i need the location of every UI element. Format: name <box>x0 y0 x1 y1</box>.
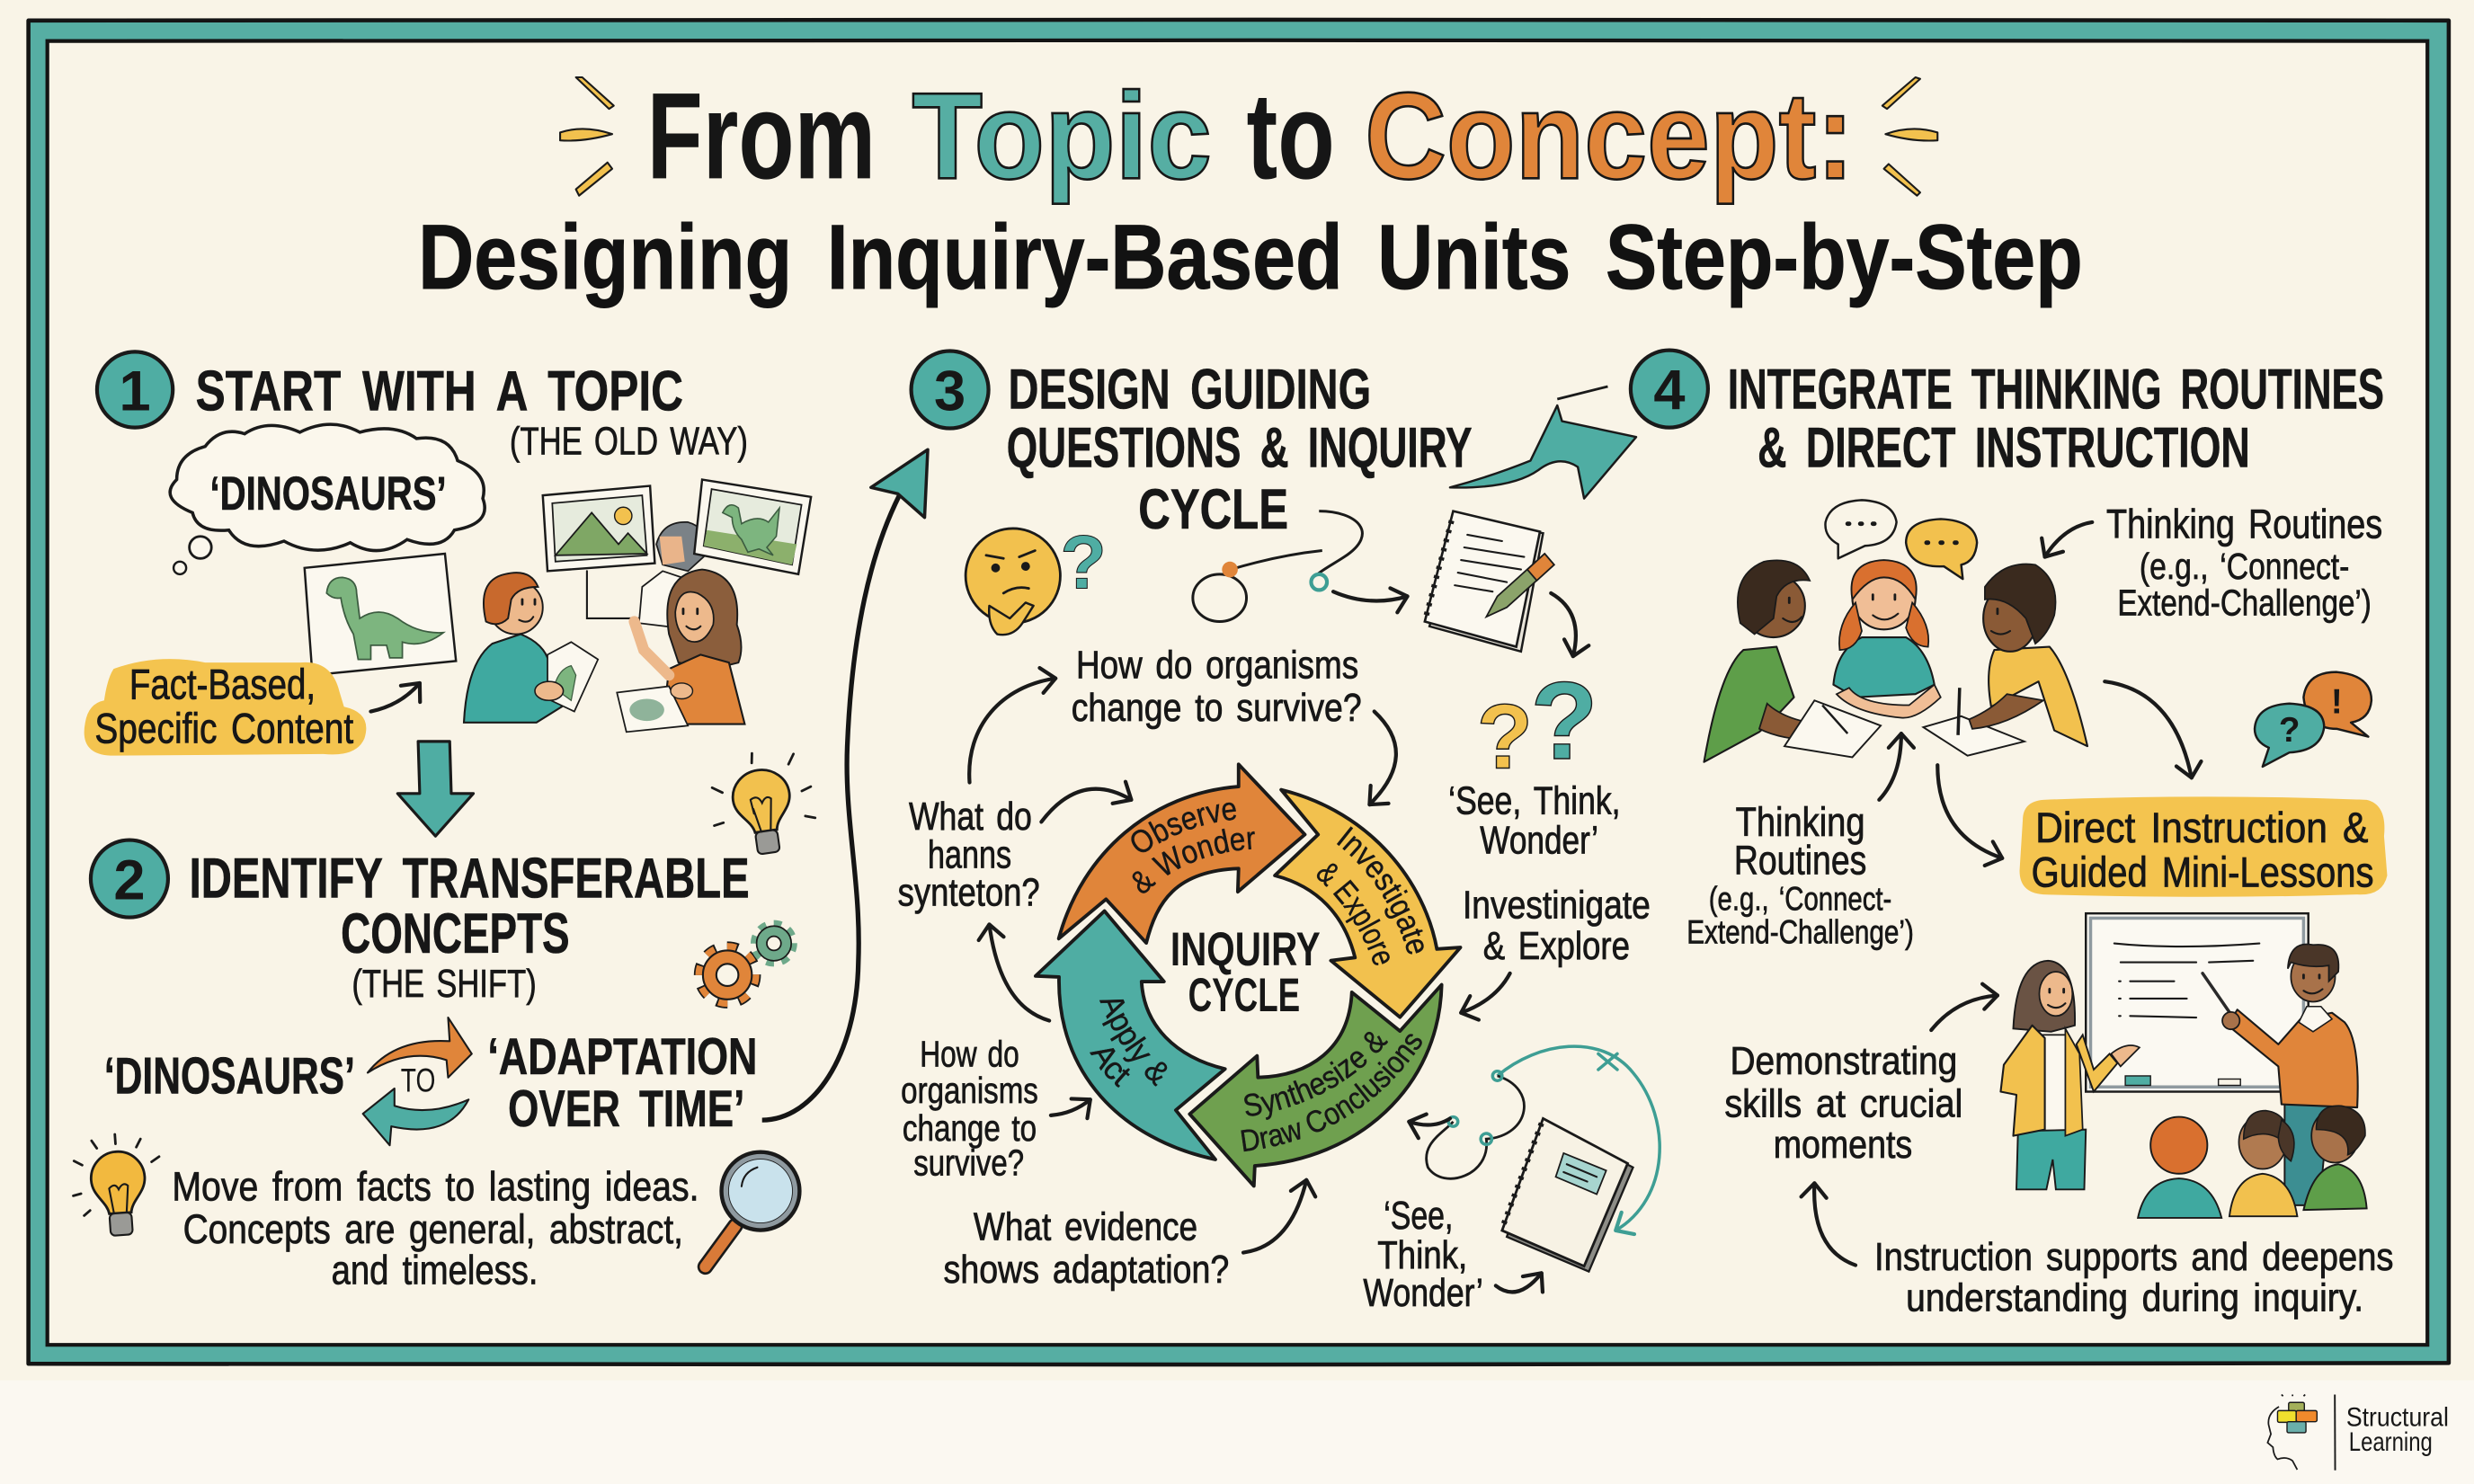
label: thinking routines top: Thinking Routines <box>2106 501 2382 547</box>
icon: magnifying glass <box>706 1155 796 1266</box>
title <box>418 67 2083 308</box>
title line 1: Topic <box>912 67 1212 205</box>
cycle stage: apply and act <box>1034 910 1227 1161</box>
illustration: dinosaur picture <box>694 480 811 574</box>
icon: yellow and teal question marks: ? <box>1477 686 1533 788</box>
illustration: male teacher <box>2203 945 2358 1205</box>
label: see think wonder top: Wonder’ <box>1480 818 1598 862</box>
chart: inquiry cycle <box>1034 762 1462 1188</box>
arrow: notebook to questions <box>1551 593 1576 656</box>
step 2 heading <box>190 848 750 965</box>
arrow: students to direct instruction left <box>1937 765 2002 858</box>
fact-based highlight label <box>85 659 366 756</box>
fact-based highlight label: Specific Content <box>94 706 353 753</box>
spiral notebook <box>1502 1118 1633 1272</box>
arrow: loop to cycle <box>1409 1118 1450 1125</box>
cycle centre label <box>1170 923 1321 1022</box>
label: demonstrating skills: Demonstrating <box>1730 1039 1957 1083</box>
cycle stage: observe and wonder <box>1057 762 1307 945</box>
arrow: step 3 to step 4 <box>1450 387 1636 499</box>
direct instruction highlight label <box>2020 796 2387 897</box>
title line 1: to <box>1247 67 1335 205</box>
arrow: investigate label to cycle <box>1461 973 1510 1013</box>
step 4 badge: 4 <box>1653 359 1685 422</box>
arrow: demonstrating label to teacher <box>1931 995 1998 1030</box>
step 4 heading <box>1728 359 2384 480</box>
guiding question left: What do <box>909 795 1032 839</box>
step 2 badge <box>91 840 168 918</box>
text: instruction supports understanding <box>1874 1235 2393 1320</box>
step 3 badge: 3 <box>934 360 966 422</box>
student right yellow shirt <box>1958 564 2087 746</box>
step 3 heading <box>1007 359 1473 541</box>
step 3 heading: CYCLE <box>1138 478 1288 541</box>
picture book <box>547 642 598 712</box>
text: instruction supports understanding: Instruction supports and deepens <box>1874 1235 2393 1279</box>
icon: discussion bubbles: ! <box>2331 682 2343 721</box>
arrow: left question to cycle <box>1041 789 1131 822</box>
label: thinking routines top: Extend-Challenge’) <box>2117 582 2372 623</box>
icon: thinking face <box>966 529 1060 635</box>
icon: gears <box>700 925 792 1001</box>
icon: yellow and teal question marks <box>1477 660 1597 788</box>
guiding question bottom: shows adaptation? <box>944 1248 1229 1292</box>
student left green shirt <box>1704 560 1847 762</box>
cycle stage: synthesize and draw conclusions: Synthesize & <box>1244 1032 1388 1120</box>
title line 1 <box>647 67 1854 205</box>
icon: yellow and teal question marks: ? <box>1530 660 1597 783</box>
paper sheets <box>1784 700 2025 757</box>
illustration: female teacher <box>2000 961 2140 1189</box>
cycle centre label: CYCLE <box>1188 969 1300 1022</box>
label: see think wonder bottom <box>1363 1194 1483 1315</box>
icon: knotted string <box>1193 511 1362 621</box>
small map card <box>617 686 688 732</box>
label: thinking routines lower <box>1686 799 1914 951</box>
student centre teal shirt <box>1833 560 1941 718</box>
step 1 badge <box>97 351 173 428</box>
label: demonstrating skills: skills at crucial <box>1724 1082 1962 1126</box>
guiding question lower left: survive? <box>913 1142 1024 1184</box>
label: see think wonder top: ‘See, Think, <box>1448 779 1620 823</box>
step 2 subheading: (THE SHIFT) <box>352 962 537 1006</box>
cycle stage: investigate and explore: & Explore <box>1316 863 1390 965</box>
thought bubble dinosaurs <box>170 424 485 574</box>
cycle stage: investigate and explore: Investigate <box>1337 826 1424 955</box>
arrow: string to notebook <box>1333 591 1408 600</box>
cycle stage: apply and act: Apply & <box>1099 1000 1167 1087</box>
step 1 subheading: (THE OLD WAY) <box>510 419 748 463</box>
step 4 badge <box>1631 351 1708 428</box>
logo: structural learning <box>2267 1394 2449 1471</box>
illustration: dinosaur poster <box>305 554 456 675</box>
step 4 heading: & DIRECT INSTRUCTION <box>1758 417 2250 480</box>
arrow: question to cycle top right <box>1369 712 1396 804</box>
arrow: fact label to illustration <box>370 683 420 712</box>
label: see think wonder bottom: Wonder’ <box>1363 1271 1483 1315</box>
direct instruction highlight label: Guided Mini-Lessons <box>2032 849 2374 896</box>
guiding question top: How do organisms <box>1076 644 1358 688</box>
arrow: label to notebook <box>1496 1273 1542 1292</box>
arrow: students to direct instruction right <box>2105 681 2192 778</box>
subtitle: Designing Inquiry-Based Units Step-by-Step <box>418 206 2083 308</box>
guiding question left: hanns <box>928 832 1011 876</box>
illustration: mountain picture <box>543 486 654 571</box>
logo divider <box>2334 1394 2336 1471</box>
direct instruction highlight label: Direct Instruction & <box>2035 804 2368 852</box>
step 1 heading: START WITH A TOPIC <box>196 360 683 422</box>
student yellow <box>2229 1111 2297 1216</box>
step 2 heading: IDENTIFY TRANSFERABLE <box>190 848 750 911</box>
arrow: thinking routines label to students <box>2045 522 2092 557</box>
label: thinking routines top: (e.g., ‘Connect- <box>2140 546 2349 587</box>
arrow: step 1 to step 2 <box>397 742 474 836</box>
icon: lightbulb with rays <box>705 746 819 860</box>
icon: discussion bubbles: ? <box>2279 711 2300 750</box>
label: thinking routines top <box>2106 501 2382 623</box>
guiding question lower left: change to <box>903 1107 1037 1149</box>
guiding question left: synteton? <box>898 870 1040 914</box>
panel: step 2 identify transferable concepts <box>69 746 819 1293</box>
logo wordmark: Learning <box>2349 1427 2433 1457</box>
panel: step 3 guiding questions and inquiry cycle <box>898 349 1661 1315</box>
title line 1: Concept: <box>1365 67 1854 205</box>
step 1 badge: 1 <box>120 360 151 422</box>
illustration: whiteboard <box>2086 913 2309 1092</box>
guiding question bottom <box>944 1204 1229 1292</box>
speech bubble yellow <box>1906 519 1977 579</box>
title sparks left <box>560 77 614 196</box>
label: investigate and explore: & Explore <box>1483 924 1630 968</box>
step 2 explanation text: Move from facts to lasting ideas. <box>172 1164 699 1210</box>
cycle stage: synthesize and draw conclusions <box>1188 983 1444 1188</box>
concept shift: dinosaurs to adaptation: TO <box>401 1062 435 1099</box>
arrow: left question to top question <box>969 679 1055 783</box>
cycle stage: investigate and explore <box>1273 787 1462 1019</box>
guiding question lower left: organisms <box>901 1070 1038 1111</box>
label: see think wonder top <box>1448 779 1620 862</box>
arrow: routines label to students <box>1879 733 1901 800</box>
cycle stage: synthesize and draw conclusions: Draw Conclusions <box>1241 1034 1422 1152</box>
concept shift: dinosaurs to adaptation: ‘DINOSAURS’ <box>104 1047 355 1105</box>
concept shift: dinosaurs to adaptation: OVER TIME’ <box>508 1080 744 1138</box>
label: thinking routines lower: Extend-Challenge’) <box>1686 914 1914 951</box>
fact-based highlight label: Fact-Based, <box>129 661 316 708</box>
label: investigate and explore <box>1463 883 1651 968</box>
concept shift: dinosaurs to adaptation: ‘ADAPTATION <box>487 1028 757 1086</box>
guiding question top: change to survive? <box>1072 686 1362 730</box>
arrow: step 2 to step 3 <box>762 449 928 1120</box>
cycle centre label: INQUIRY <box>1170 923 1321 976</box>
label: thinking routines lower: Thinking <box>1736 799 1865 845</box>
cycle stage: observe and wonder: & Wonder <box>1133 829 1255 893</box>
label: demonstrating skills: moments <box>1774 1123 1912 1167</box>
step 3 heading: DESIGN GUIDING <box>1009 359 1371 422</box>
step 2 explanation text: and timeless. <box>332 1248 538 1293</box>
icon: teal arrow <box>363 1089 468 1145</box>
icon: discussion bubbles <box>2255 672 2372 767</box>
illustration: boy reading <box>464 573 598 723</box>
cycle stage: observe and wonder: Observe <box>1131 802 1237 852</box>
arrow: lower left question to cycle <box>1051 1099 1090 1115</box>
label: thinking routines lower: Routines <box>1734 837 1866 883</box>
label: thinking routines lower: (e.g., ‘Connect- <box>1709 881 1891 918</box>
label: see think wonder bottom: ‘See, <box>1384 1194 1453 1238</box>
guiding question lower left: How do <box>920 1033 1019 1074</box>
illustration: students watching <box>2138 1106 2367 1218</box>
logo wordmark: Structural <box>2346 1403 2449 1433</box>
title sparks right <box>1882 77 1937 196</box>
icon: small lightbulb <box>69 1132 165 1239</box>
label: investigate and explore: Investinigate <box>1463 883 1651 927</box>
illustration: teacher behind pictures <box>587 522 706 628</box>
illustration: students collaborating <box>1704 560 2087 762</box>
illustration: girl pointing <box>617 570 744 732</box>
arrow: instruction note to demonstrating label <box>1814 1183 1856 1266</box>
panel: step 1 start with a topic <box>85 351 811 756</box>
guiding question top <box>1072 644 1362 730</box>
logo wordmark <box>2346 1403 2449 1457</box>
label: demonstrating skills <box>1724 1039 1962 1167</box>
arrow: bottom question to cycle <box>1243 1180 1306 1253</box>
guiding question bottom: What evidence <box>974 1204 1197 1249</box>
icon: string loop and notebook <box>1427 1046 1660 1272</box>
guiding question left <box>898 795 1040 914</box>
step 2 explanation text <box>172 1164 699 1293</box>
step 3 heading: QUESTIONS & INQUIRY <box>1007 417 1473 480</box>
student teal <box>2138 1117 2221 1218</box>
panel: step 4 thinking routines and direct instruction <box>1631 351 2393 1320</box>
thought bubble dinosaurs: ‘DINOSAURS’ <box>209 467 447 520</box>
arrow: cycle to left question <box>989 924 1049 1021</box>
step 3 badge <box>912 351 989 429</box>
guiding question lower left <box>901 1033 1038 1184</box>
step 2 explanation text: Concepts are general, abstract, <box>183 1206 683 1252</box>
title line 1: From <box>647 67 876 205</box>
icon: orange arrow <box>368 1017 472 1078</box>
label: see think wonder bottom: Think, <box>1377 1233 1467 1277</box>
cycle stage: apply and act: Act <box>1090 1048 1130 1088</box>
text: instruction supports understanding: understanding during inquiry. <box>1906 1275 2363 1320</box>
step 2 badge: 2 <box>113 849 146 911</box>
student green <box>2303 1106 2367 1210</box>
concept shift: dinosaurs to adaptation <box>104 1017 757 1145</box>
icon: notebook and pencil <box>1425 511 1554 652</box>
step 2 heading: CONCEPTS <box>341 902 570 965</box>
speech bubble white <box>1825 500 1897 558</box>
logo head and bricks icon <box>2267 1394 2317 1470</box>
icon: teal question mark: ? <box>1060 520 1107 605</box>
